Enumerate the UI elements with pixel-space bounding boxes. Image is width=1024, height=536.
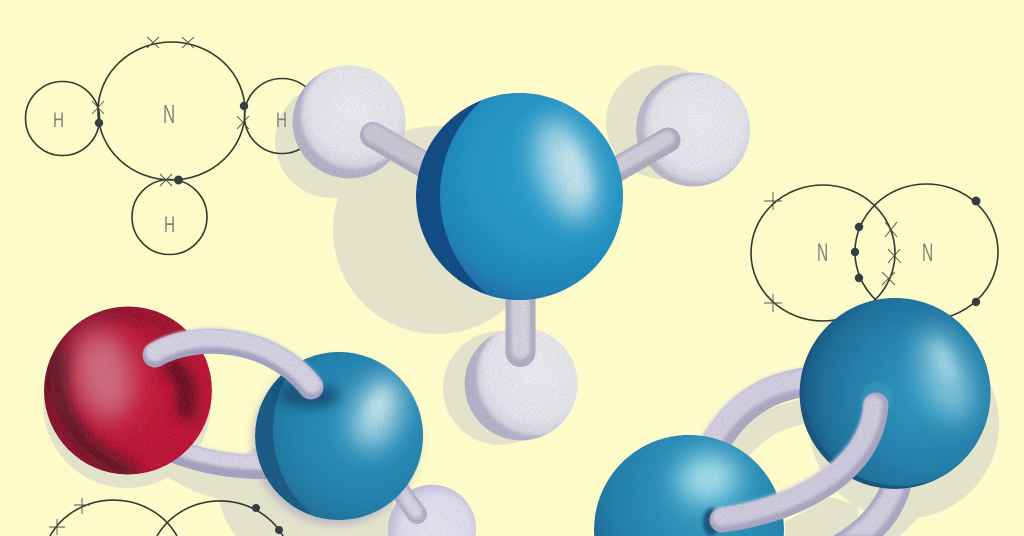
label N: N — [163, 99, 175, 129]
bond to small hydrogen — [395, 482, 417, 514]
hydrogen shell bottom — [132, 180, 207, 254]
soft shadow under blue atom — [252, 357, 420, 525]
label N left: N — [817, 239, 828, 267]
label H left: H — [53, 108, 64, 132]
bond bottom — [506, 280, 536, 352]
blue atom upper right — [800, 294, 996, 489]
hydrogen atom small — [388, 485, 476, 536]
upper ring bond — [708, 377, 815, 450]
hydrogen shell left — [26, 82, 100, 156]
nitrogen shell — [98, 42, 245, 180]
nitrogen atom centre — [416, 93, 623, 300]
bond left — [373, 133, 450, 180]
hydrogen atom bottom — [464, 330, 578, 440]
electrons dots — [851, 196, 980, 306]
nitrogen shell left — [751, 185, 895, 321]
diagram: ammonia electron dot-cross — [26, 37, 320, 254]
front bond — [722, 405, 876, 520]
electrons crosses — [49, 498, 90, 535]
blue atom nitrogen — [255, 352, 423, 520]
molecule: two blue linked atoms — [594, 294, 996, 536]
hydrogen atom right — [636, 72, 754, 186]
electrons dots — [252, 504, 283, 534]
molecule: ammonia model — [292, 61, 754, 440]
label H bottom: H — [164, 213, 175, 238]
shell left — [50, 500, 177, 536]
label H right: H — [276, 108, 287, 132]
bond right — [590, 138, 668, 185]
lower ring bond — [833, 480, 913, 536]
diagram: partial molecule bottom left — [49, 498, 283, 536]
hydrogen atom left — [292, 61, 409, 178]
upper bond — [155, 338, 312, 387]
label N right: N — [922, 239, 933, 267]
electrons crosses — [764, 192, 901, 312]
lower bond — [150, 436, 272, 467]
nitrogen shell right — [855, 184, 998, 320]
red atom oxygen — [44, 306, 212, 474]
hydrogen shell right — [244, 78, 320, 154]
blue atom lower left — [594, 435, 784, 536]
electrons dots — [95, 102, 248, 184]
electrons crosses — [92, 37, 249, 186]
shell right — [157, 501, 283, 536]
diagram: nitrogen molecule dot-cross — [751, 184, 998, 321]
molecule: red and blue linked atoms — [44, 306, 497, 536]
